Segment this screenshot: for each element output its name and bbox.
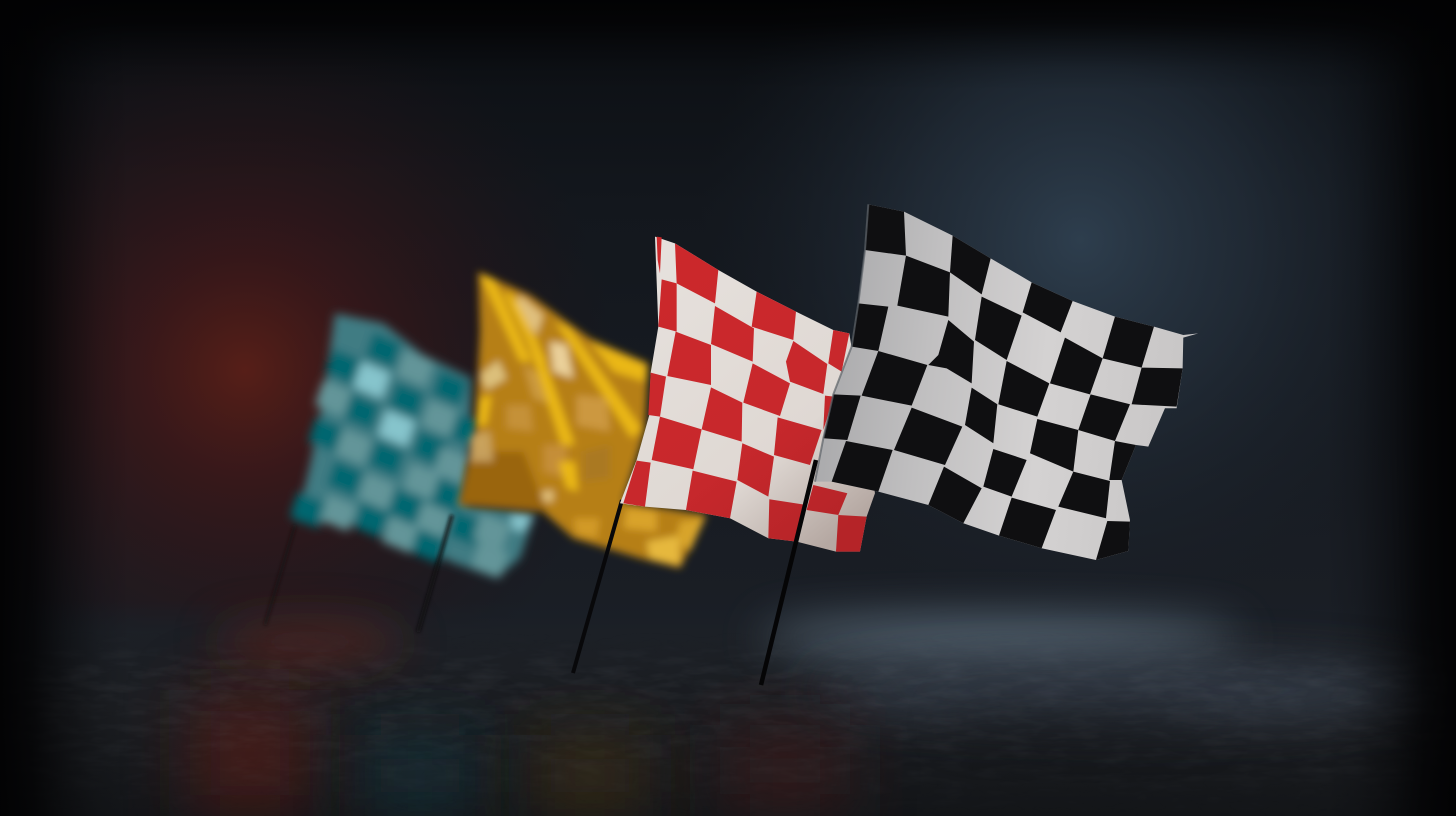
pole: black flag	[761, 460, 816, 685]
floor: textured ground with light reflections	[0, 600, 1456, 816]
flag: black and white checkered	[815, 204, 1198, 560]
flag: yellow checkered, blurred	[458, 272, 707, 568]
flag: red checkered	[620, 237, 875, 552]
pole: red flag	[573, 500, 622, 673]
pole: teal flag	[265, 525, 295, 625]
pole: yellow flag	[418, 515, 452, 632]
flag: teal checkered, blurred	[290, 313, 535, 578]
